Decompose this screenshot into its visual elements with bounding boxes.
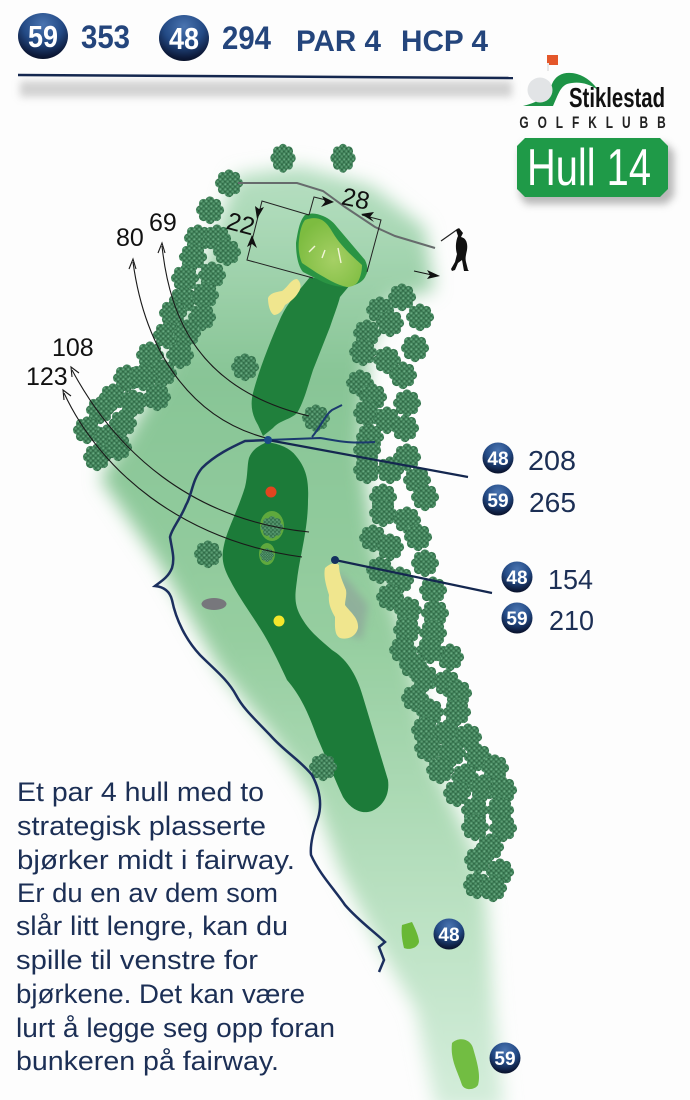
icon: golfer — [441, 228, 469, 271]
text block: hole description: strategisk plasserte — [17, 811, 266, 841]
icon: dimension arrowheads — [247, 196, 374, 248]
text block: hole description: Et par 4 hull med to — [17, 777, 264, 807]
distance 69: 69 — [149, 209, 177, 237]
header rule with shadow — [18, 75, 513, 97]
icon: 48 ball: 48 — [487, 449, 509, 470]
distance 265: 265 — [529, 487, 576, 518]
icon: tee 48 ball — [159, 15, 209, 61]
icon: arc arrowheads — [63, 243, 165, 400]
text block: hole description: bjørkene. Det kan være — [16, 979, 305, 1009]
icon: tee ball 59: 59 — [494, 1049, 516, 1070]
cart path — [238, 183, 435, 248]
logo subline: GOLFKLUBB — [519, 114, 675, 133]
icon: 59 ball: 59 — [487, 491, 509, 512]
green — [296, 213, 367, 287]
distance 208: 208 — [528, 445, 576, 476]
bunker: by the green — [268, 279, 301, 315]
icon: red marker — [266, 486, 276, 498]
icon: flag — [547, 55, 558, 71]
text block: hole description: slår litt lengre, kan du — [16, 911, 288, 941]
green width 28: 28 — [339, 183, 372, 216]
par: PAR 4 — [296, 25, 381, 58]
text block: hole description: bunkeren på fairway. — [16, 1046, 279, 1076]
tee: 48 — [402, 922, 419, 949]
arrow: play direction — [414, 270, 440, 279]
callout: bunker distances — [502, 562, 594, 636]
distance 154: 154 — [548, 564, 593, 595]
tree line: left — [73, 224, 241, 471]
icon: tee ball 48: 48 — [438, 925, 460, 946]
creek — [155, 440, 385, 972]
bunker: fairway — [324, 563, 368, 640]
fairway birch trees — [259, 511, 284, 565]
logo: Stiklestad Golfklubb — [519, 55, 675, 133]
rock — [202, 598, 226, 610]
header: tee distances, par and handicap — [18, 13, 488, 61]
badge: Hull 14: Hull 14 — [527, 139, 651, 197]
icon: 59 ball: 59 — [506, 609, 528, 630]
text block: hole description: Er du en av dem som — [17, 878, 278, 908]
distance 108: 108 — [52, 334, 94, 362]
distance 353: 353 — [81, 19, 130, 55]
icon: tee 59 ball — [18, 13, 68, 59]
leader line: creek distances — [264, 436, 468, 477]
green dimension bracket — [247, 196, 381, 278]
text block: hole description: spille til venstre for — [16, 945, 258, 975]
green depth 22: 22 — [224, 207, 258, 241]
distance 210: 210 — [549, 605, 594, 636]
distance 80: 80 — [116, 224, 144, 252]
text block: hole description: lurt å legge seg opp foran — [16, 1013, 335, 1043]
icon: tee 48 ball: 48 — [169, 21, 199, 56]
tree line: right — [346, 283, 517, 902]
fairway: upper — [252, 277, 350, 436]
icon: tee ball 59 — [490, 1042, 520, 1074]
handicap: HCP 4 — [401, 25, 488, 58]
leader line: bunker distances — [331, 556, 492, 593]
creek branch — [268, 405, 375, 443]
icon: yellow marker — [274, 616, 284, 626]
icon: tee ball 48 — [434, 918, 464, 950]
distance 294: 294 — [222, 20, 271, 56]
icon: tee 59 ball: 59 — [28, 19, 58, 54]
distance arcs — [63, 243, 309, 557]
fairway: lower — [223, 442, 388, 812]
icon: 48 ball: 48 — [506, 568, 528, 589]
icon: golf ball and green swoosh — [523, 73, 598, 106]
icon: slope arrows on green — [309, 246, 341, 263]
distance 123: 123 — [26, 363, 68, 391]
single trees — [194, 144, 356, 781]
tee: 59 — [452, 1039, 479, 1089]
hole map — [26, 144, 517, 1100]
text block: hole description: bjørker midt i fairway. — [17, 845, 295, 875]
rough — [100, 166, 504, 1100]
text block: hole description — [16, 777, 335, 1076]
callout: creek distances — [482, 442, 576, 518]
